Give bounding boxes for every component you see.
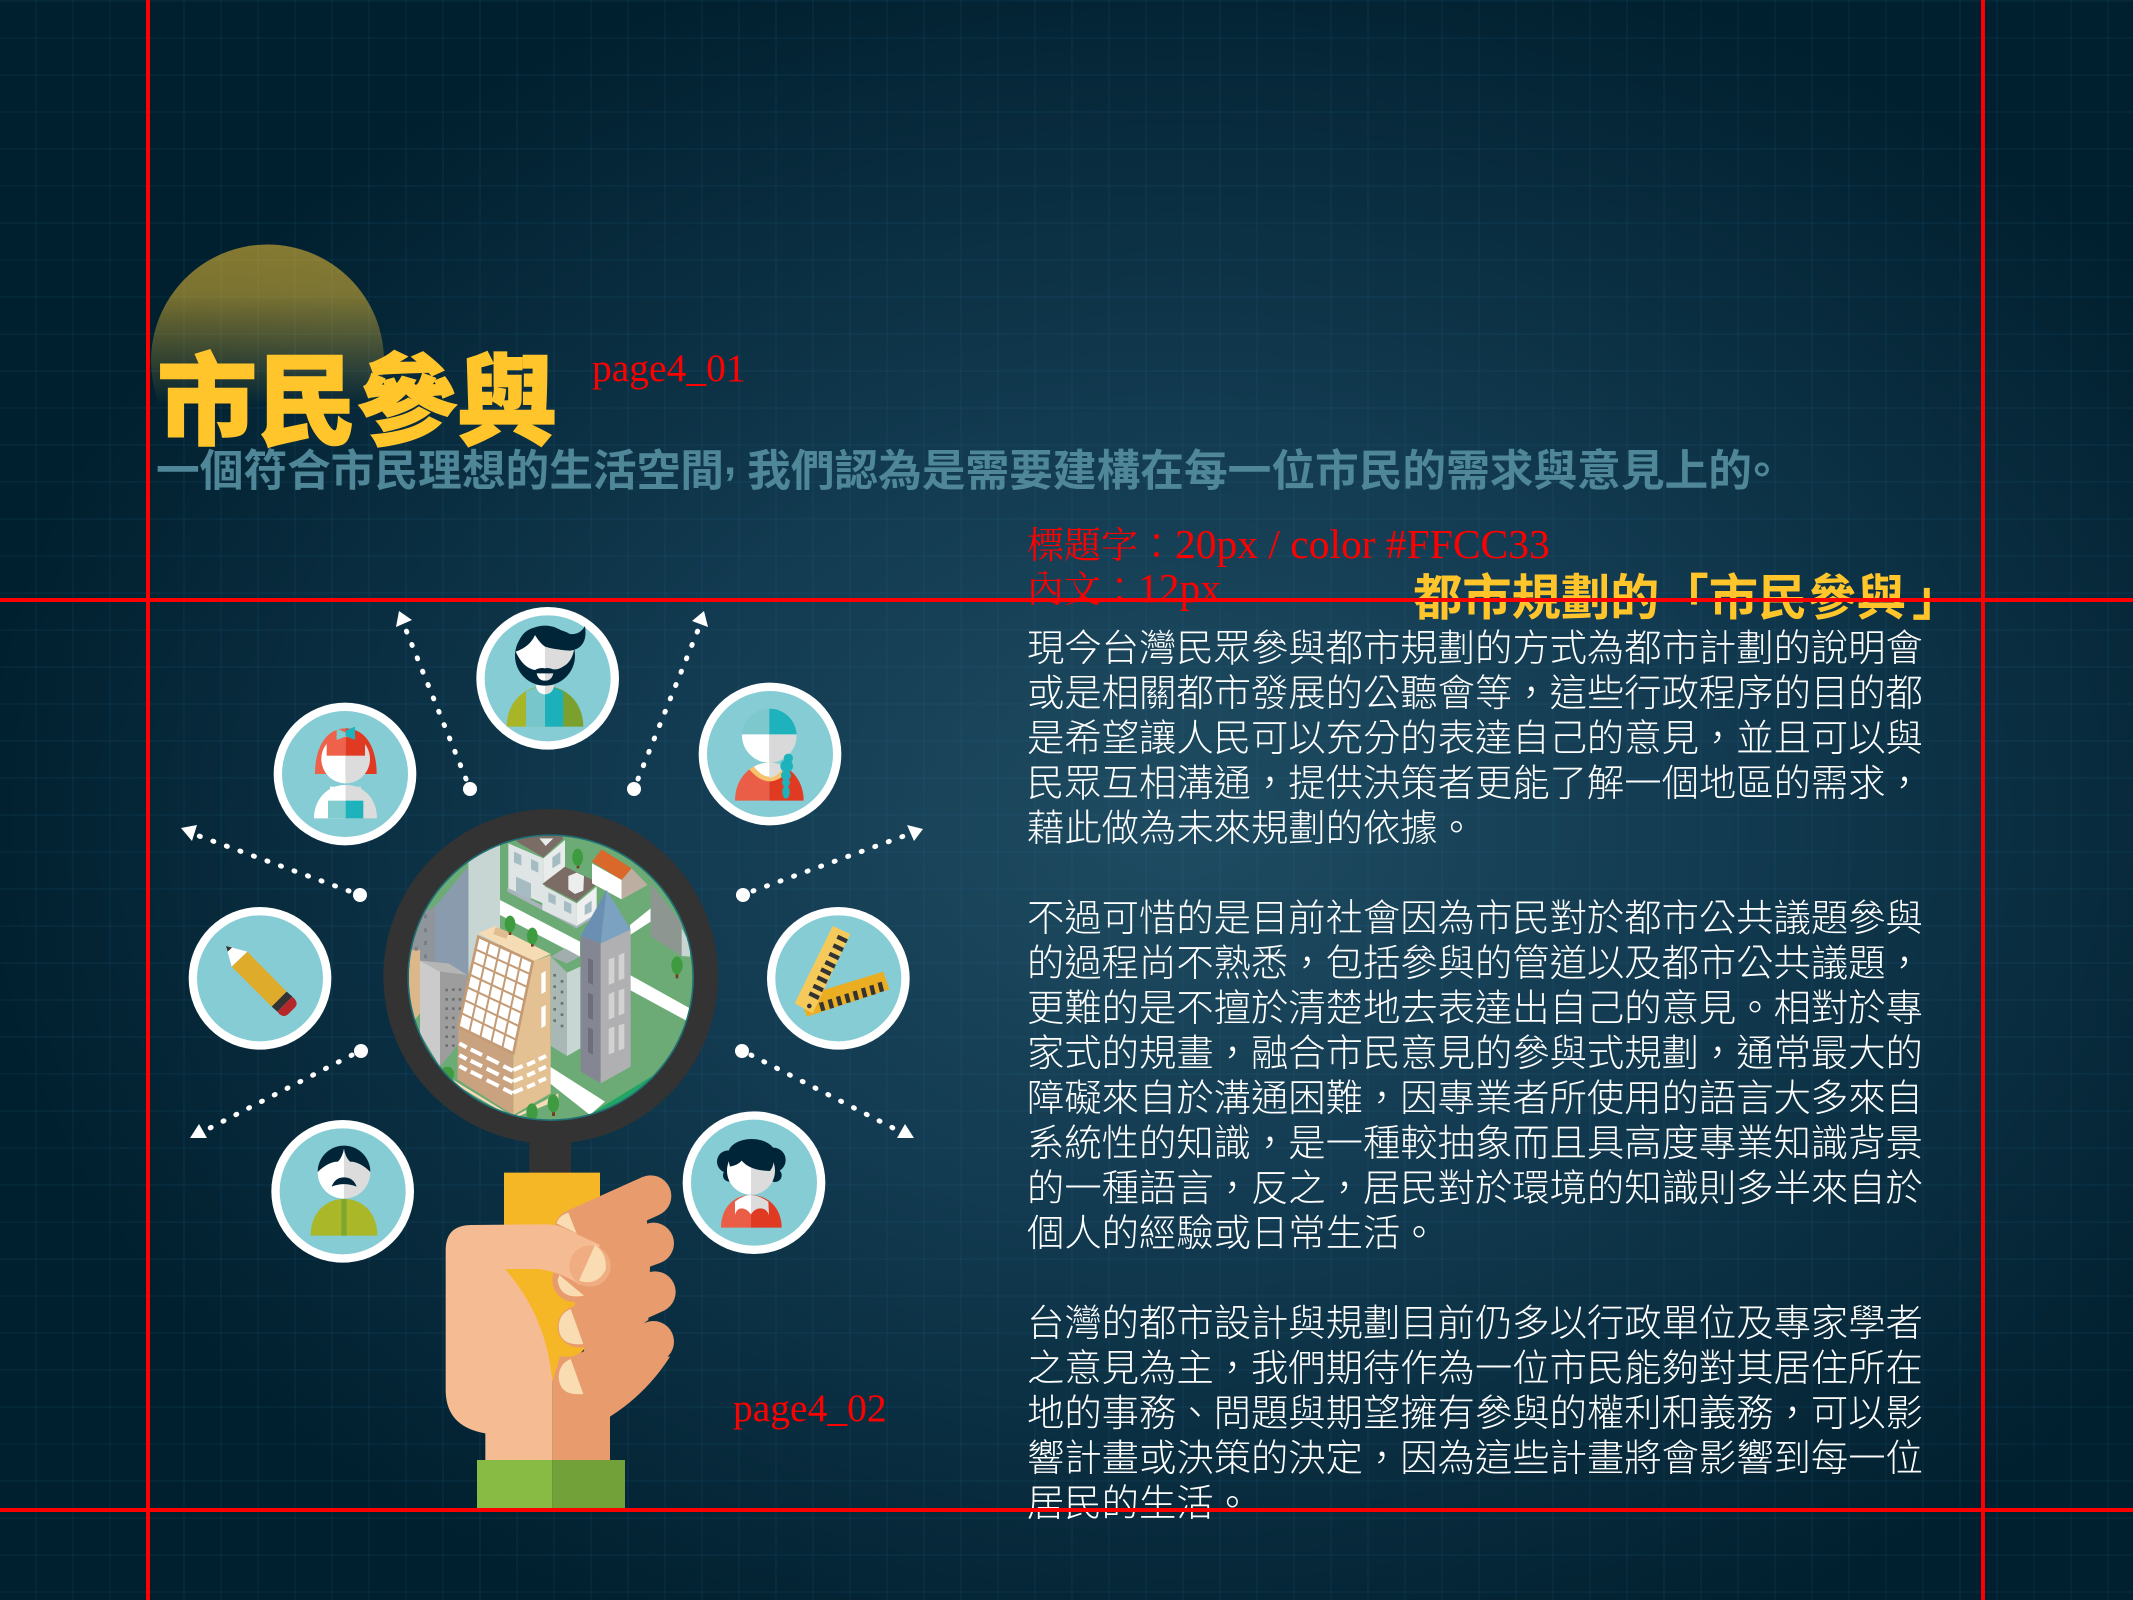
- body text: 障礙來自於溝通困難，因專業者所使用的語言大多來自: [1027, 1068, 1923, 1122]
- arrow: top left: [396, 611, 477, 796]
- body text: 民眾互相溝通，提供決策者更能了解一個地區的需求，: [1027, 753, 1923, 807]
- title: 市民參與: [157, 321, 557, 466]
- icon: girl with braid: [699, 683, 841, 825]
- body text: 現今台灣民眾參與都市規劃的方式為都市計劃的說明會: [1027, 618, 1923, 672]
- arrow: lower left: [190, 1044, 368, 1138]
- fingers: [552, 1196, 670, 1460]
- section heading: 都市規劃的「市民參與」: [1413, 559, 1961, 630]
- decorative sun circle: [151, 244, 384, 397]
- body text: 系統性的知識，是一種較抽象而且具高度專業知識背景: [1027, 1113, 1923, 1167]
- magnifier lens with city: [383, 809, 718, 1144]
- subtitle: 一個符合市民理想的生活空間,我們認為是需要建構在每一位市民的需求與意見上的。: [156, 435, 1784, 499]
- body text: 藉此做為未來規劃的依據。: [1027, 798, 1475, 852]
- icon: woman with curly hair: [683, 1111, 825, 1254]
- body text: 台灣的都市設計與規劃目前仍多以行政單位及專家學者: [1027, 1293, 1923, 1347]
- body text: [1027, 618, 1923, 1527]
- body text: 或是相關都市發展的公聽會等，這些行政程序的目的都: [1027, 663, 1923, 717]
- annotation: page4_01: page4_01: [592, 346, 746, 390]
- annotation: title spec: 標題字：20px / color #FFCC33: [1027, 515, 1550, 569]
- body text: 的一種語言，反之，居民對於環境的知識則多半來自於: [1027, 1158, 1923, 1212]
- body text: 更難的是不擅於清楚地去表達出自己的意見。相對於專: [1027, 978, 1923, 1032]
- body text: 之意見為主，我們期待作為一位市民能夠對其居住所在: [1027, 1338, 1923, 1392]
- body text: 響計畫或決策的決定，因為這些計畫將會影響到每一位: [1027, 1428, 1923, 1482]
- annotation: page4_02: page4_02: [733, 1386, 887, 1430]
- icon: bearded man: [476, 607, 619, 750]
- magnifier handle: [529, 1123, 571, 1173]
- icon: folding rulers: [767, 907, 910, 1050]
- body text: 的過程尚不熟悉，包括參與的管道以及都市公共議題，: [1027, 933, 1923, 987]
- arrow: top right: [627, 611, 708, 796]
- body text: 家式的規畫，融合市民意見的參與式規劃，通常最大的: [1027, 1023, 1923, 1077]
- body text: 個人的經驗或日常生活。: [1027, 1203, 1438, 1257]
- body text: 居民的生活。: [1027, 1473, 1251, 1527]
- icon: man with moustache: [271, 1120, 414, 1263]
- body text: 地的事務、問題與期望擁有參與的權利和義務，可以影: [1027, 1383, 1923, 1437]
- yellow grip: [504, 1173, 600, 1382]
- shirt cuff: [477, 1460, 625, 1510]
- icon: girl with red hair: [274, 703, 416, 845]
- hand holding magnifier: [446, 1123, 670, 1510]
- icon: pencil: [189, 907, 331, 1050]
- palm and thumb: [446, 1224, 600, 1460]
- fingernails: [557, 1213, 584, 1394]
- annotation: body spec: 內文：12px: [1027, 559, 1221, 613]
- arrow: upper left: [181, 825, 367, 902]
- body text: 不過可惜的是目前社會因為市民對於都市公共議題參與: [1027, 888, 1923, 942]
- arrow: upper right: [736, 825, 923, 902]
- illustration: hand holding magnifier with citizen icons: [181, 607, 923, 1508]
- arrow: lower right: [735, 1044, 914, 1138]
- body text: 是希望讓人民可以充分的表達自己的意見，並且可以與: [1027, 708, 1923, 762]
